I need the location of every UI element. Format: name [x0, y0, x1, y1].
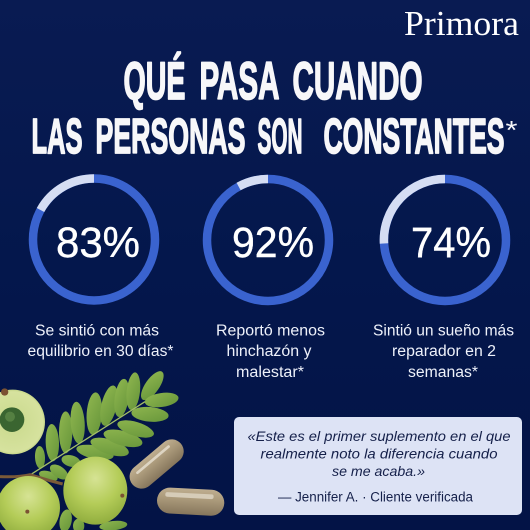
- half fruit: [0, 388, 45, 454]
- capsule 2: [156, 487, 225, 516]
- stat ring: 92%: 92%: [232, 219, 314, 267]
- testimonial card: [234, 417, 522, 515]
- stat ring: 92%: [207, 179, 329, 301]
- caption: 83%: Se sintió con más: [35, 322, 159, 340]
- title: LAS: [32, 110, 82, 164]
- caption: 74%: [373, 322, 514, 381]
- stat ring: 74%: 74%: [411, 219, 491, 267]
- title: PASA: [200, 52, 280, 111]
- caption: 74%: semanas*: [408, 364, 478, 381]
- caption: 92%: [216, 322, 325, 381]
- quote text: realmente noto la diferencia cuando: [260, 446, 498, 462]
- caption: 92%: hinchazón y: [226, 343, 312, 360]
- quote text: se me acaba.»: [332, 463, 425, 479]
- caption: 83%: [28, 322, 174, 360]
- logo: Primora: Primora: [404, 4, 519, 43]
- quote text: [248, 428, 511, 479]
- capsule 1: [125, 434, 189, 494]
- stat ring: 74%: [384, 179, 506, 301]
- caption: 83%: equilibrio en 30 días*: [28, 343, 174, 360]
- caption: 92%: Reportó menos: [216, 322, 325, 340]
- whole fruit right: [63, 457, 127, 525]
- illustration: amla fruit, leaves and capsules: [0, 368, 225, 530]
- caption: 92%: malestar*: [236, 364, 304, 381]
- caption: 74%: reparador en 2: [392, 343, 496, 360]
- quote text: «Este es el primer suplemento en el que: [248, 428, 511, 444]
- stat ring: 83%: [33, 178, 155, 300]
- stat ring: 83%: 83%: [56, 219, 140, 267]
- title: PERSONAS: [96, 110, 246, 164]
- title: CUANDO: [292, 52, 422, 111]
- stem and leaves: [0, 368, 179, 530]
- title: SON: [258, 110, 302, 164]
- whole fruit left: [0, 476, 60, 530]
- caption: 74%: Sintió un sueño más: [373, 322, 514, 340]
- quote attribution: — Jennifer A. · Cliente verificada: [278, 490, 473, 504]
- title: *: [506, 115, 518, 145]
- title: QUÉ: [124, 51, 186, 111]
- title: [32, 51, 518, 164]
